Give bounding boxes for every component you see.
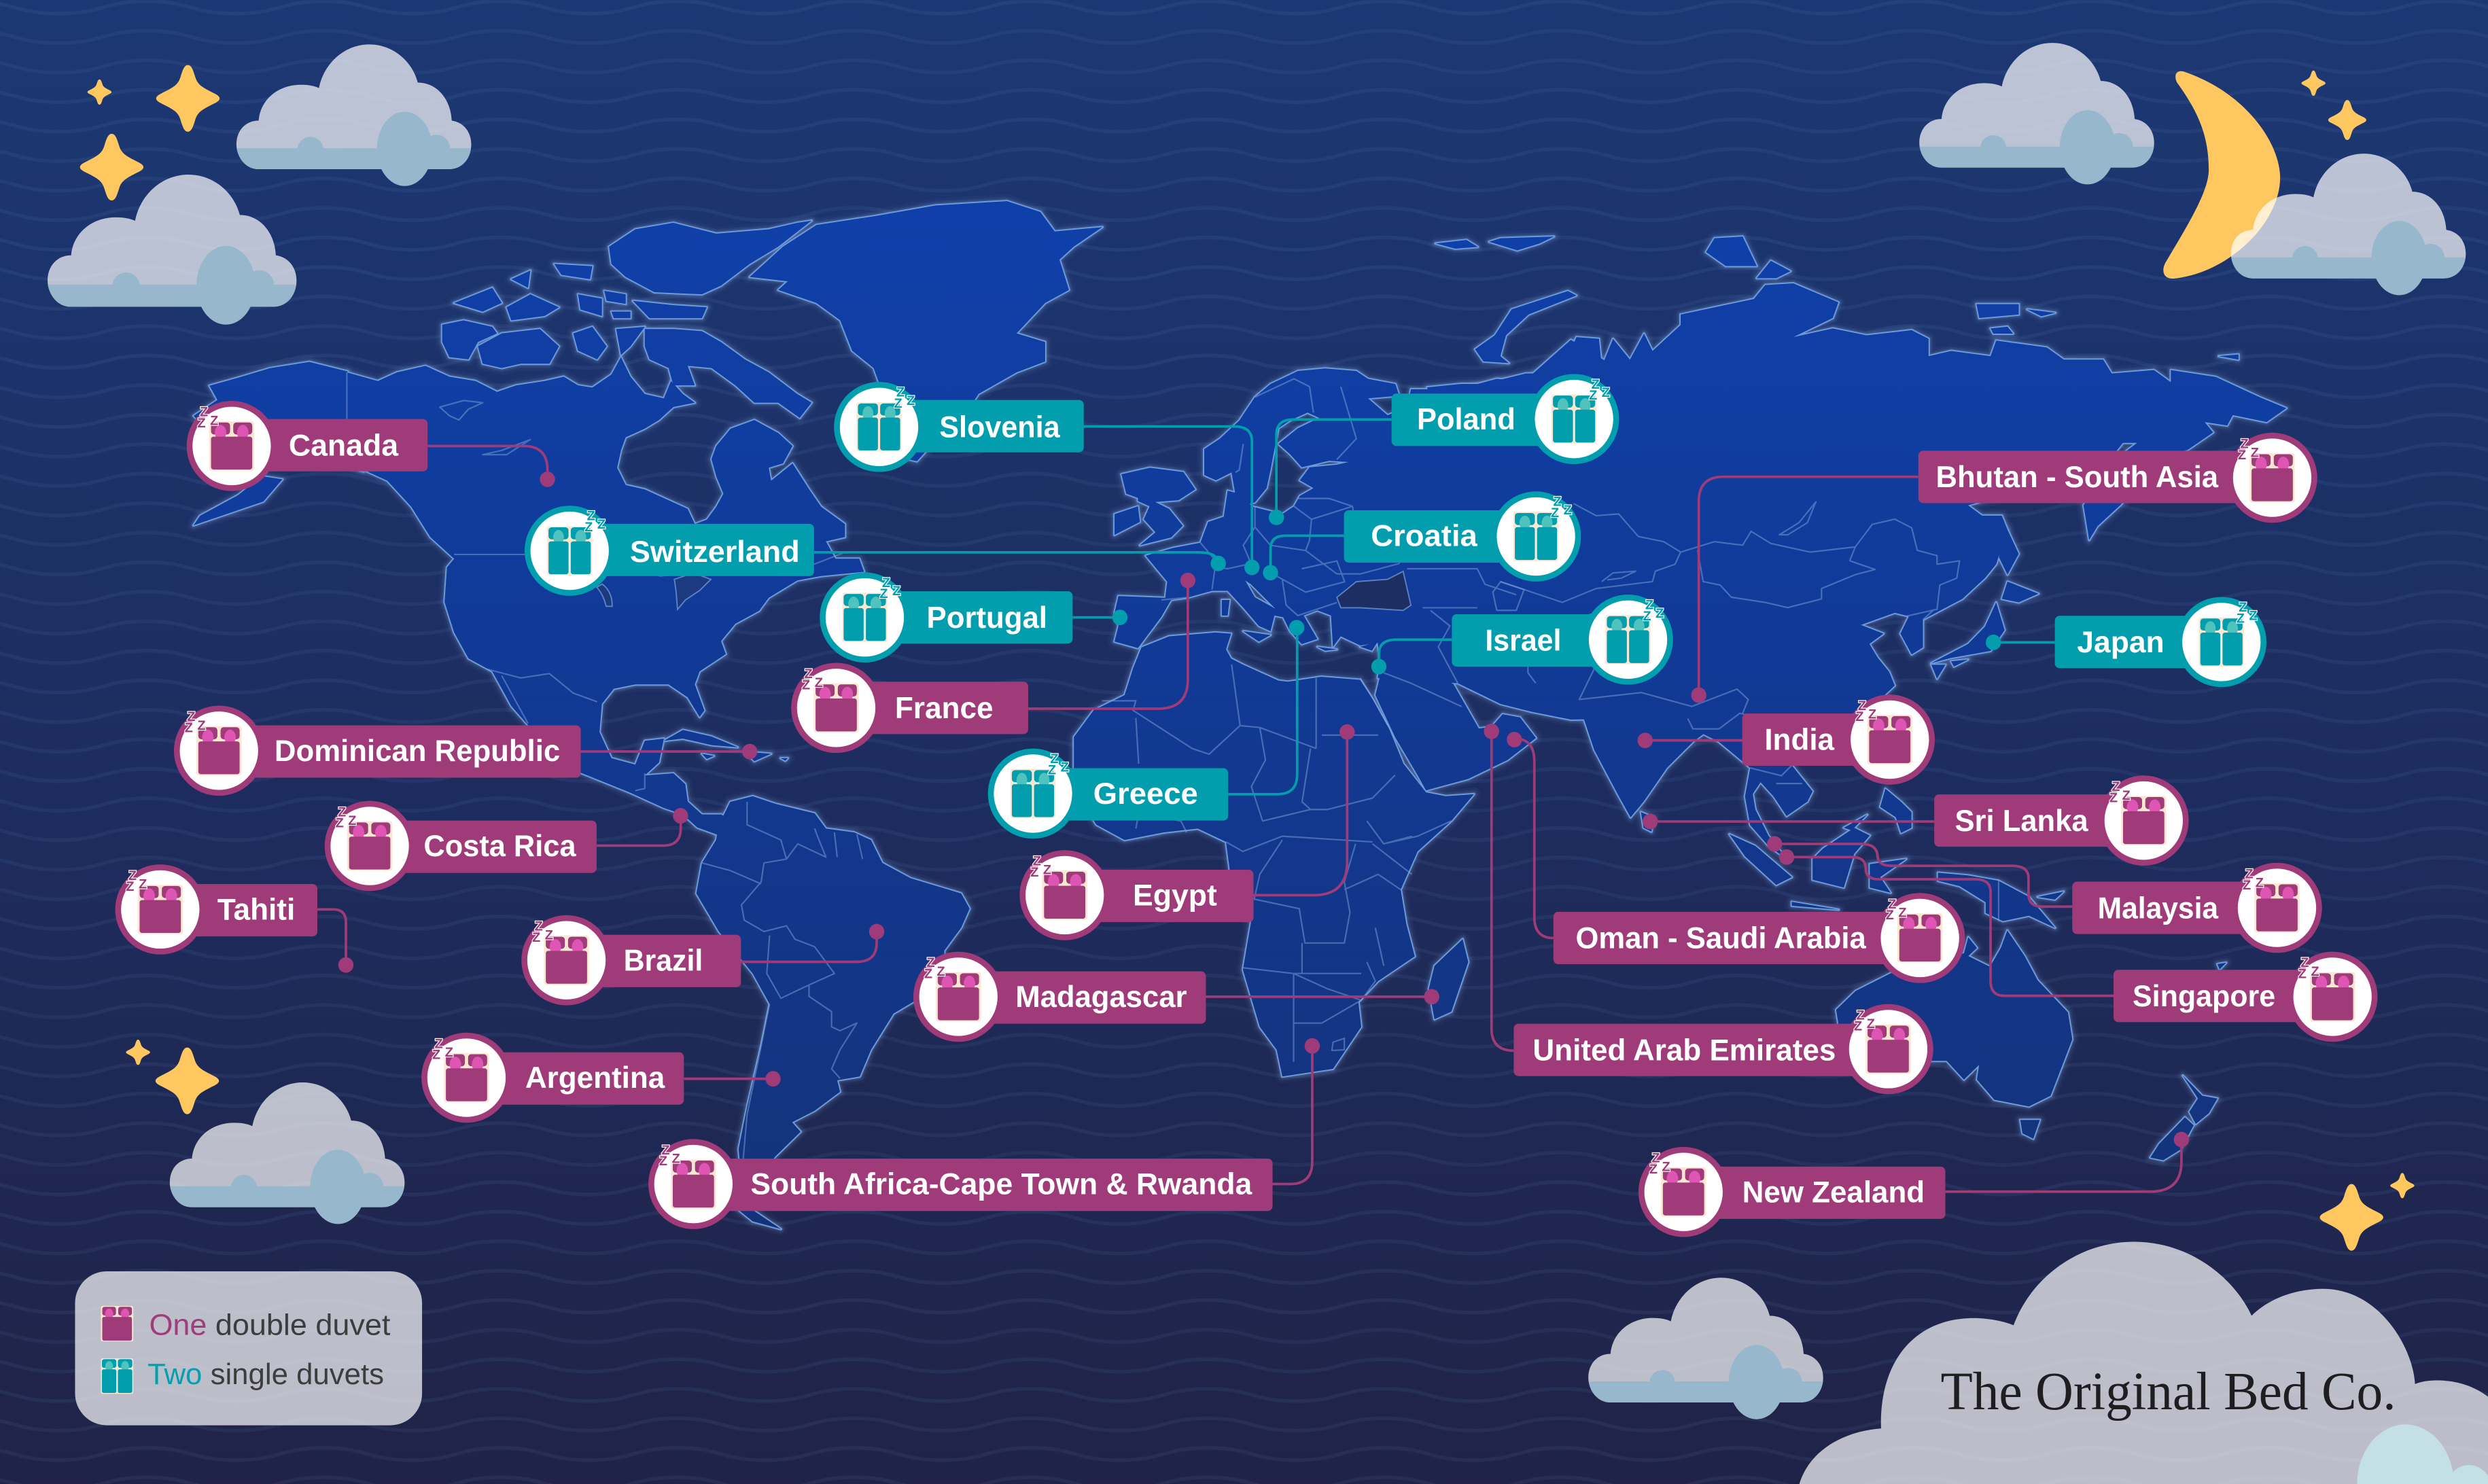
label: India: ZZZ [1855, 699, 1876, 724]
label: Bhutan - South Asia [1918, 433, 2317, 523]
label: Poland: ZZZ [1589, 377, 1610, 403]
label: Greece: ZZZ [1048, 752, 1069, 777]
label: Greece: Greece [1093, 777, 1198, 811]
label: Argentina: ZZZ [432, 1036, 453, 1063]
legend icon: one double duvet [101, 1306, 133, 1341]
label: Portugal: ZZZ [879, 576, 900, 601]
connector lines: teal countries [814, 419, 2055, 794]
label: Madagascar: ZZZ [924, 955, 945, 982]
brand name: The Original Bed Co. [1940, 1362, 2396, 1421]
cloud: bottom centre [1588, 1277, 1823, 1419]
label: Argentina [421, 1033, 684, 1123]
label: Croatia: ZZZ [1551, 495, 1572, 520]
label: Canada: Canada [289, 429, 398, 462]
cloud: top left large [48, 175, 296, 325]
label: Dominican Republic: ZZZ [185, 709, 206, 736]
label: Portugal [820, 572, 1072, 662]
label: South Africa-Cape Town & Rwanda: South Africa-Cape Town & Rwanda [750, 1168, 1252, 1201]
label: Bhutan - South Asia: ZZZ [2238, 436, 2259, 463]
label: New Zealand [1639, 1147, 1945, 1237]
label: Egypt [1019, 850, 1254, 940]
label: Japan: ZZZ [2237, 600, 2258, 626]
label: Greece [988, 749, 1228, 838]
label: Brazil: Brazil [624, 944, 703, 977]
label: Japan: Japan [2077, 626, 2165, 659]
label: Madagascar: Madagascar [1015, 980, 1187, 1014]
connector lines: magenta countries [317, 446, 2189, 1192]
label: New Zealand: New Zealand [1742, 1176, 1925, 1209]
label: Brazil [521, 915, 741, 1006]
stars [80, 65, 2415, 1251]
national borders [347, 372, 1999, 1180]
label: Malaysia [2072, 863, 2322, 953]
label: Slovenia [834, 382, 1084, 472]
label: Poland [1392, 374, 1619, 464]
label: India [1742, 694, 1935, 785]
label: Israel [1452, 595, 1673, 685]
label: Singapore: ZZZ [2298, 955, 2319, 982]
legend icon: two single duvets [101, 1358, 133, 1394]
label: Sri Lanka: Sri Lanka [1955, 805, 2088, 838]
label: United Arab Emirates [1513, 1004, 1933, 1094]
label: Switzerland: ZZZ [584, 509, 606, 535]
Black Sea [1337, 571, 1411, 610]
label: Japan [2055, 597, 2266, 687]
label: Oman - Saudi Arabia: Oman - Saudi Arabia [1575, 922, 1866, 955]
label: Dominican Republic [174, 706, 581, 796]
label: Brazil: ZZZ [532, 919, 553, 945]
label: Oman - Saudi Arabia: ZZZ [1886, 897, 1907, 923]
label: Croatia [1344, 491, 1581, 582]
label: Tahiti [116, 864, 317, 955]
label: New Zealand: ZZZ [1649, 1151, 1670, 1177]
label: Argentina: Argentina [525, 1061, 665, 1095]
legend [75, 1271, 422, 1426]
label: Sri Lanka: ZZZ [2109, 779, 2131, 805]
legend text: one double duvet: One double duvet [149, 1309, 390, 1341]
label: United Arab Emirates: ZZZ [1854, 1008, 1875, 1034]
label: Switzerland [525, 506, 814, 596]
label: India: India [1764, 724, 1834, 757]
label: Bhutan - South Asia: Bhutan - South Asia [1935, 461, 2218, 494]
world map [194, 201, 2286, 1229]
label: Croatia: Croatia [1371, 520, 1477, 553]
label: Madagascar [913, 952, 1206, 1042]
label: Sri Lanka [1934, 775, 2189, 866]
label: Egypt: ZZZ [1030, 854, 1051, 880]
label: Tahiti: ZZZ [126, 868, 147, 894]
label: Tahiti: Tahiti [217, 894, 295, 927]
label: Israel: Israel [1485, 624, 1561, 658]
label: France: ZZZ [802, 667, 823, 692]
cloud: top right [1919, 43, 2154, 184]
label: Costa Rica: Costa Rica [423, 830, 576, 863]
legend text: two single duvets: Two single duvets [147, 1358, 384, 1391]
label: Costa Rica: ZZZ [336, 805, 356, 831]
label: Dominican Republic: Dominican Republic [275, 735, 560, 768]
label: Slovenia: ZZZ [894, 385, 915, 411]
cloud: lower left [170, 1082, 404, 1224]
label: Malaysia: Malaysia [2098, 891, 2218, 925]
cloud: top left small [236, 44, 471, 186]
label: France: France [895, 692, 994, 725]
label: Canada [187, 401, 427, 491]
label: Singapore: Singapore [2133, 980, 2275, 1013]
label: Singapore [2114, 952, 2377, 1042]
label: France [791, 662, 1028, 753]
label: South Africa-Cape Town & Rwanda [648, 1139, 1273, 1229]
label: United Arab Emirates: United Arab Emirates [1532, 1034, 1836, 1067]
label: Portugal: Portugal [927, 601, 1047, 635]
label: South Africa-Cape Town & Rwanda: ZZZ [659, 1143, 680, 1169]
label: Poland: Poland [1417, 403, 1515, 436]
label: Israel: ZZZ [1643, 597, 1664, 624]
label: Canada: ZZZ [197, 405, 218, 431]
label: Switzerland: Switzerland [630, 535, 800, 569]
Great Lakes [597, 573, 711, 610]
label: Costa Rica [325, 801, 597, 891]
label: Slovenia: Slovenia [939, 411, 1060, 444]
label: Egypt: Egypt [1133, 879, 1217, 913]
label: Malaysia: ZZZ [2243, 866, 2264, 893]
cloud: beside moon [2231, 154, 2466, 295]
label: Oman - Saudi Arabia [1554, 893, 1965, 983]
moon [2163, 71, 2280, 279]
logo cloud with brand name [1800, 1242, 2488, 1484]
